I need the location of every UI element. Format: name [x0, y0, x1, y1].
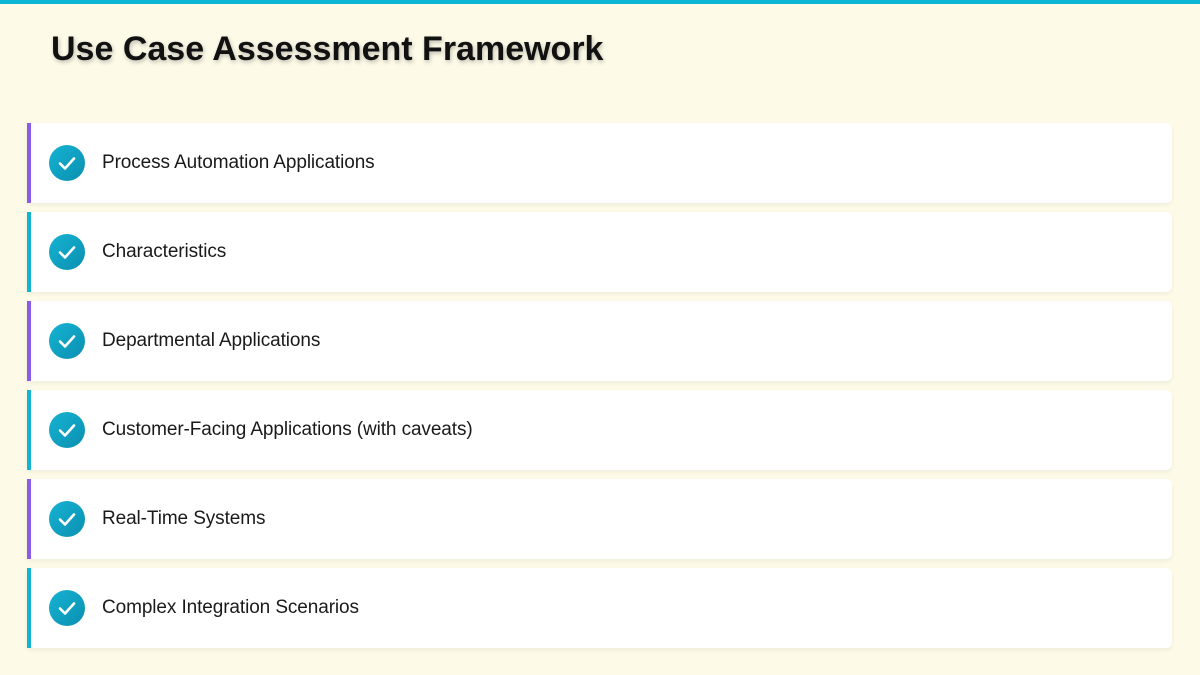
card: real-time: [27, 479, 1172, 559]
icon: check: [49, 145, 85, 181]
card: customer-facing: [27, 390, 1172, 470]
card: complex integration: Complex Integration Scenarios: [102, 597, 359, 618]
card: departmental: Departmental Applications: [102, 330, 320, 351]
card: departmental: [27, 301, 1172, 381]
card: process automation: Process Automation Applications: [102, 152, 375, 173]
card: customer-facing: Customer-Facing Applications (with caveats): [102, 419, 473, 440]
icon: check: [49, 234, 85, 270]
icon: check: [49, 590, 85, 626]
card: characteristics: [27, 212, 1172, 292]
icon: check: [49, 412, 85, 448]
icon: check: [49, 501, 85, 537]
card: characteristics: Characteristics: [102, 241, 226, 262]
card: process automation: [27, 123, 1172, 203]
icon: check: [49, 323, 85, 359]
title: Use Case Assessment Framework: [51, 30, 603, 68]
card: complex integration: [27, 568, 1172, 648]
card: real-time: Real-Time Systems: [102, 508, 265, 529]
